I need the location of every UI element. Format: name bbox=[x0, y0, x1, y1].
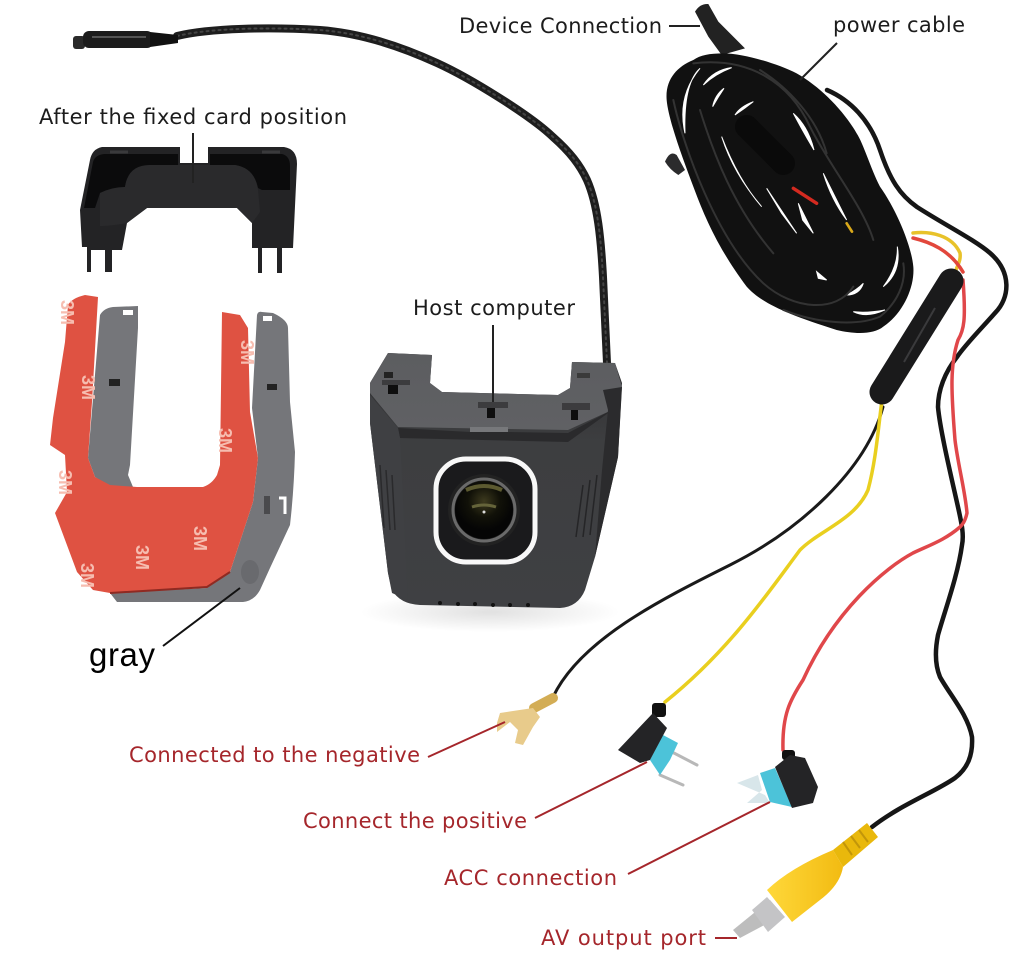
black negative wire bbox=[553, 407, 883, 697]
coiled power cable bbox=[665, 4, 913, 333]
red ACC wire bbox=[783, 280, 967, 750]
red 3M adhesive tape: 3M bbox=[237, 340, 257, 365]
fixed card bracket bbox=[80, 147, 297, 273]
RCA AV plug bbox=[733, 823, 878, 938]
leader lines bbox=[163, 26, 837, 938]
gray metal plate: right bbox=[110, 312, 295, 602]
red 3M adhesive tape: 3M bbox=[215, 428, 235, 453]
red 3M adhesive tape: 3M bbox=[57, 300, 77, 325]
red 3M adhesive tape: 3M bbox=[132, 545, 152, 570]
label: ACC: ACC connection bbox=[444, 866, 617, 890]
fuse tap positive bbox=[618, 703, 697, 785]
fuse holder bbox=[882, 281, 951, 392]
camera top plate bbox=[370, 353, 622, 430]
red 3M adhesive tape: 3M bbox=[190, 526, 210, 551]
gray metal plate: left bbox=[88, 306, 138, 487]
3M marks: 3M bbox=[77, 563, 97, 588]
left plug bbox=[73, 31, 178, 49]
spade terminal bbox=[497, 698, 553, 745]
camera host bbox=[370, 353, 622, 608]
lens with white ring bbox=[436, 459, 535, 562]
inner splice: red and yellow wires bbox=[747, 127, 783, 163]
bracket pockets bbox=[84, 154, 178, 208]
yellow positive wire bbox=[665, 400, 882, 702]
device plug bbox=[695, 4, 745, 55]
red 3M adhesive tape: 3M bbox=[78, 375, 98, 400]
fuse tap ACC bbox=[737, 750, 818, 808]
label: device connection: Device Connection bbox=[459, 14, 662, 38]
inner arch bbox=[100, 165, 260, 226]
fuse module wires bbox=[553, 233, 967, 750]
label: positive: Connect the positive bbox=[303, 809, 527, 833]
label: negative: Connected to the negative bbox=[129, 743, 420, 767]
thin black wire from coil past the fuse bbox=[827, 90, 1006, 827]
red 3M adhesive tape: 3M bbox=[55, 470, 75, 495]
left cable stub bbox=[665, 153, 685, 175]
label: power cable: power cable bbox=[833, 13, 965, 37]
label: host computer: Host computer bbox=[413, 296, 575, 320]
label: card position: After the fixed card position bbox=[39, 105, 347, 129]
red 3M adhesive tape bbox=[50, 295, 258, 593]
label: gray: gray bbox=[89, 636, 156, 673]
gooseneck cable and left plug bbox=[73, 28, 607, 363]
label: AV output: AV output port bbox=[541, 926, 706, 950]
